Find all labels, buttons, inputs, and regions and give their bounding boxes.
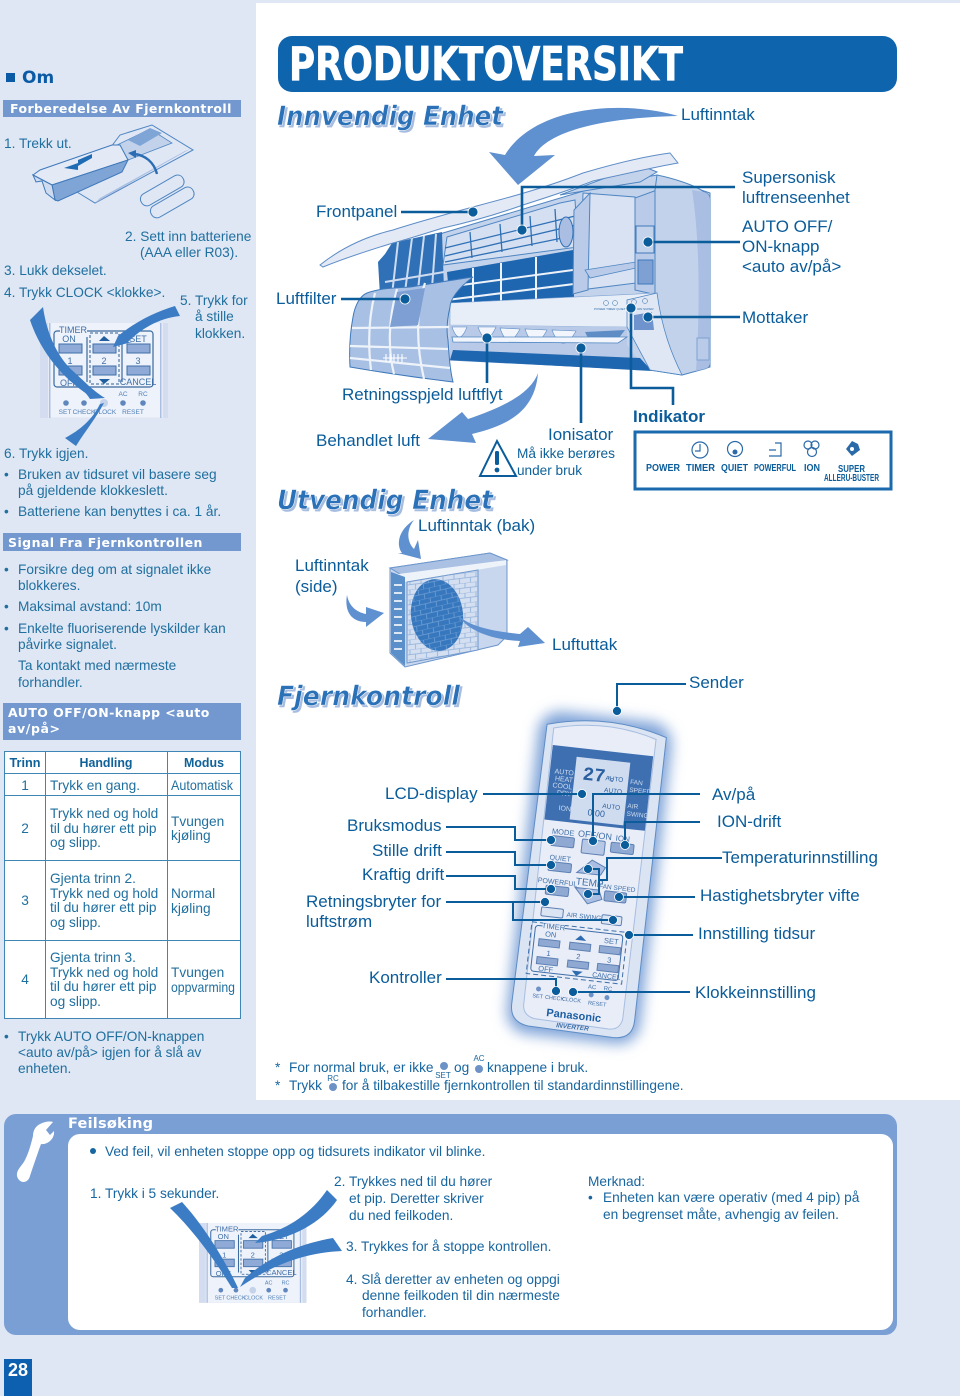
bullet notes: after step 6: Bruken av tidsuret vil basere seg	[18, 467, 217, 482]
footnotes: *	[275, 1060, 281, 1075]
signal notes: forhandler.	[18, 675, 83, 690]
heading: Innvendig Enhet: Innvendig Enhet	[277, 101, 504, 132]
labels: remote control: Bruksmodus	[347, 816, 441, 835]
signal notes: Enkelte fluoriserende lyskilder kan	[18, 621, 226, 636]
instruction steps 1-5: 5. Trykk for	[180, 293, 248, 308]
warning	[480, 441, 615, 478]
table: modes: Trykk en gang.	[50, 778, 140, 793]
arrow: press clock from below	[65, 403, 104, 446]
illustration: remote control: SWING	[626, 811, 649, 820]
illustration: remote control: TEMP	[575, 876, 604, 891]
footnotes: SET	[435, 1071, 451, 1080]
heading bar: auto off/on: AUTO OFF/ON-knapp <auto	[8, 705, 210, 720]
signal notes: •	[4, 562, 9, 577]
signal notes: •	[4, 621, 9, 636]
footnotes: knappene i bruk.	[487, 1060, 588, 1075]
footnotes: Trykk	[289, 1078, 322, 1093]
heading: Om	[6, 68, 54, 88]
troubleshooting keypad: CANCEL	[266, 1268, 297, 1277]
panel: troubleshooting	[4, 1114, 897, 1335]
illustration: remote control: TIMER	[541, 921, 566, 933]
labels: remote control: ION-drift	[717, 812, 782, 831]
illustration: remote control: POWERFUL	[537, 877, 578, 889]
labels: indoor unit: Ionisator	[548, 425, 614, 444]
illustration: remote control: SET	[604, 936, 619, 947]
indicator panel: POWERFUL	[754, 462, 796, 474]
footnotes: og	[454, 1060, 469, 1075]
leaders: remote control	[446, 684, 722, 996]
instruction steps 1-5: klokken.	[195, 326, 245, 341]
labels: remote control: Kontroller	[369, 968, 442, 987]
troubleshooting keypad: TIMER	[215, 1224, 239, 1233]
illustration: timer keypad: RC	[138, 391, 148, 398]
labels: remote control	[306, 673, 878, 1002]
indicator panel	[633, 408, 891, 489]
arrow: treated air	[428, 373, 538, 443]
illustration: outdoor unit	[390, 553, 507, 667]
labels: indoor unit: ON-knapp	[742, 237, 819, 256]
heading bar: auto off/on	[3, 703, 241, 740]
illustration: remote control	[505, 709, 674, 1046]
illustration: remote control: AUTO	[602, 803, 621, 812]
table: modes: 4	[21, 972, 29, 987]
indicator panel: ALLERU-BUSTER	[824, 472, 879, 484]
illustration: remote control: CANCEL	[592, 972, 621, 982]
bullet notes: after step 6: •	[4, 504, 9, 519]
note: auto button again: •	[4, 1029, 9, 1044]
table: modes: og slipp.	[50, 835, 101, 850]
illustration: timer keypad: 1	[67, 356, 73, 366]
panel: troubleshooting: Feilsøking	[68, 1116, 153, 1132]
illustration: remote control: COOL	[552, 782, 573, 791]
illustration: remote control: INVERTER	[556, 1022, 589, 1033]
illustration: remote control: ION	[558, 805, 571, 813]
bullet notes: after step 6: Batteriene kan benyttes i ca. 1 år.	[18, 504, 221, 519]
indicator panel: POWER	[646, 462, 680, 474]
troubleshooting text: Enheten kan være operativ (med 4 pip) på	[603, 1190, 860, 1205]
table: modes: Handling	[80, 755, 133, 770]
table: modes: Gjenta trinn 3.	[50, 950, 136, 965]
footnotes: *	[275, 1078, 281, 1093]
illustration: timer keypad: RESET	[122, 409, 144, 416]
arrow: press clock	[30, 307, 105, 399]
troubleshooting keypad: 1	[222, 1250, 226, 1259]
page number: 28	[8, 1360, 28, 1380]
footnotes: AC	[473, 1054, 485, 1063]
instruction steps 1-5: 1. Trekk ut.	[4, 136, 72, 151]
page number	[4, 1359, 32, 1396]
table: modes	[4, 751, 240, 1018]
troubleshooting text: 3. Trykkes for å stoppe kontrollen.	[346, 1239, 551, 1254]
title banner: PRODUKTOVERSIKT	[289, 37, 683, 91]
heading bar: Forberedelse: Forberedelse Av Fjernkontroll	[10, 101, 232, 116]
labels: outdoor unit: Luftinntak (bak)	[418, 516, 535, 535]
illustration: timer keypad: TIMER	[59, 325, 87, 335]
illustration: timer keypad: CHECK	[73, 409, 96, 416]
labels: indoor unit	[276, 105, 850, 450]
troubleshooting text: 4. Slå deretter av enheten og oppgi	[346, 1272, 560, 1287]
table: modes: Trykk ned og hold	[50, 965, 158, 980]
illustration: indoor unit: ION SUPER	[637, 307, 654, 311]
labels: outdoor unit: Luftinntak	[295, 556, 369, 575]
arrow: troubleshooting step 1	[170, 1202, 238, 1288]
labels: outdoor unit	[295, 516, 618, 654]
labels: remote control: Stille drift	[372, 841, 442, 860]
warning: under bruk	[517, 462, 583, 478]
illustration: remote control: AIR SWING	[566, 912, 601, 922]
arrow: side intake	[346, 595, 384, 627]
signal notes: Maksimal avstand: 10m	[18, 599, 162, 614]
bullet notes: after step 6: •	[4, 467, 9, 482]
table: modes: Automatisk	[171, 778, 233, 793]
troubleshooting keypad: RESET	[268, 1295, 287, 1301]
troubleshooting keypad: CLOCK	[244, 1295, 263, 1301]
troubleshooting text: et pip. Deretter skriver	[349, 1191, 484, 1206]
labels: remote control: luftstrøm	[306, 912, 372, 931]
troubleshooting keypad: OFF	[216, 1269, 231, 1278]
signal notes: •	[4, 599, 9, 614]
table: modes: Tvungen	[171, 814, 224, 829]
heading: Om: Om	[22, 68, 54, 88]
panel: product overview	[256, 3, 960, 1100]
table: modes: Normal	[171, 886, 215, 901]
illustration: indoor unit	[320, 153, 710, 382]
troubleshooting text	[90, 1144, 860, 1320]
illustration: remote battery compartment	[33, 125, 196, 220]
illustration: remote control: FAN	[630, 779, 643, 787]
troubleshooting keypad: SET	[215, 1295, 226, 1301]
labels: remote control: Av/på	[712, 785, 756, 804]
illustration: remote control: OFF/ON	[578, 828, 612, 842]
illustration: remote control: QUIET	[549, 854, 572, 864]
indicator panel: ION	[804, 462, 820, 474]
illustration: timer keypad: CLOCK	[94, 409, 117, 416]
illustration: timer keypad: AC	[118, 391, 128, 398]
illustration: remote control: FAN SPEED	[599, 883, 636, 894]
troubleshooting text: denne feilkoden til din nærmeste	[362, 1288, 560, 1303]
arrow: set clock	[113, 306, 180, 347]
note: auto button again: Trykk AUTO OFF/ON-knappen	[18, 1029, 204, 1044]
illustration: timer keypad: 3	[135, 356, 141, 366]
labels: outdoor unit: (side)	[295, 577, 338, 596]
arrow: troubleshooting step 3	[240, 1238, 342, 1287]
labels: indoor unit: Retningsspjeld luftflyt	[342, 385, 503, 404]
table: modes: 2	[21, 821, 29, 836]
illustration: remote control: AUTO	[605, 775, 624, 784]
heading bar: auto off/on: av/på>	[8, 721, 61, 736]
icon: wrench	[17, 1122, 54, 1182]
troubleshooting keypad: AC	[265, 1280, 273, 1286]
illustration: remote control: Panasonic	[546, 1007, 602, 1025]
table: modes: til du hører ett pip	[50, 821, 157, 836]
labels: indoor unit: Frontpanel	[316, 202, 397, 221]
note: auto button again: enheten.	[18, 1061, 71, 1076]
leaders: indoor unit	[341, 187, 740, 423]
illustration: remote control: AUTO	[554, 768, 575, 778]
illustration: remote control: SPEED	[629, 787, 652, 796]
illustration: remote control: 3	[607, 955, 612, 965]
labels: remote control: LCD-display	[385, 784, 478, 803]
instruction steps 1-5	[4, 136, 251, 341]
bullet notes: after step 6: 6. Trykk igjen.	[4, 446, 88, 461]
illustration: remote control: ON	[545, 929, 557, 940]
signal notes: Forsikre deg om at signalet ikke	[18, 562, 211, 577]
labels: indoor unit: <auto av/på>	[742, 257, 841, 276]
illustration: timer keypad: SET	[59, 409, 71, 416]
table: modes: 3	[21, 893, 29, 908]
troubleshooting text: forhandler.	[362, 1305, 427, 1320]
illustration: timer keypad	[40, 323, 168, 418]
troubleshooting text: •	[588, 1190, 593, 1205]
indicator panel: Indikator	[633, 408, 706, 426]
heading: Utvendig Enhet: Utvendig Enhet	[277, 485, 494, 516]
troubleshooting text: en begrenset måte, avhengig av feilen.	[603, 1207, 839, 1222]
note: auto button again	[4, 1029, 204, 1076]
illustration: timer keypad: CANCEL	[120, 377, 156, 387]
illustration: remote control: RC	[603, 986, 613, 993]
troubleshooting keypad: 3	[279, 1250, 283, 1259]
labels: outdoor unit: Luftuttak	[552, 635, 618, 654]
labels: remote control: Kraftig drift	[362, 865, 444, 884]
troubleshooting text: du ned feilkoden.	[349, 1208, 453, 1223]
table: modes: Modus	[184, 755, 224, 770]
instruction steps 1-5: 3. Lukk dekselet.	[4, 263, 107, 278]
troubleshooting text: 1. Trykk i 5 sekunder.	[90, 1186, 219, 1201]
labels: remote control: Sender	[689, 673, 744, 692]
illustration: remote control: 1	[546, 949, 551, 958]
labels: remote control: Temperaturinnstilling	[722, 848, 878, 867]
labels: indoor unit: Luftfilter	[276, 289, 337, 308]
labels: indoor unit: luftrenseenhet	[742, 188, 850, 207]
illustration: remote control: CHECK	[545, 995, 565, 1003]
footnotes	[275, 1054, 684, 1093]
labels: remote control: Hastighetsbryter vifte	[700, 886, 860, 905]
instruction steps 1-5: 4. Trykk CLOCK <klokke>.	[4, 285, 165, 300]
instruction steps 1-5: (AAA eller R03).	[140, 245, 238, 260]
table: modes: Trinn	[10, 755, 41, 770]
table: modes: til du hører ett pip	[50, 979, 157, 994]
illustration: remote control: AUTO	[604, 787, 622, 796]
footnotes: for å tilbakestille fjernkontrollen til standardinnstillingene.	[342, 1078, 684, 1093]
illustration: timer keypad: 2	[101, 356, 107, 366]
bullet notes: after step 6	[4, 446, 221, 519]
footnotes: For normal bruk, er ikke	[289, 1060, 434, 1075]
table: modes: 1	[21, 778, 29, 793]
table: modes: og slipp.	[50, 994, 101, 1009]
arrow: air intake	[489, 108, 678, 185]
labels: remote control: Retningsbryter for	[306, 892, 441, 911]
illustration: remote control: SET	[532, 993, 544, 1001]
labels: remote control: Innstilling tidsur	[698, 924, 816, 943]
troubleshooting keypad: RC	[282, 1280, 290, 1286]
illustration: remote control: OFF	[538, 964, 554, 974]
arrow: outlet	[458, 615, 545, 647]
illustration: remote control: AC	[588, 984, 597, 991]
labels: indoor unit: Behandlet luft	[316, 431, 420, 450]
illustration: remote control: 0:00	[587, 807, 606, 819]
signal notes: blokkeres.	[18, 578, 80, 593]
warning: Må ikke berøres	[517, 445, 615, 461]
table: modes: kjøling	[171, 828, 211, 843]
labels: remote control: Klokkeinnstilling	[695, 983, 816, 1002]
illustration: remote control: HEAT	[554, 775, 574, 785]
labels: indoor unit: AUTO OFF/	[742, 217, 833, 236]
indicator panel: QUIET	[721, 462, 748, 474]
indicator panel: SUPER	[838, 463, 865, 475]
illustration: remote control: °c	[607, 775, 615, 784]
illustration: remote control: RESET	[588, 1001, 607, 1009]
instruction steps 1-5: å stille	[195, 309, 234, 324]
footnotes: RC	[327, 1074, 339, 1083]
troubleshooting keypad: SET	[274, 1232, 289, 1241]
illustration: remote control: CLOCK	[562, 997, 582, 1005]
illustration: timer keypad: OFF	[60, 378, 78, 388]
instruction steps 1-5: 2. Sett inn batteriene	[125, 229, 251, 244]
labels: indoor unit: Luftinntak	[681, 105, 755, 124]
illustration: remote control: DRY	[556, 790, 572, 798]
troubleshooting text: Merknad:	[588, 1174, 645, 1189]
signal notes	[4, 562, 226, 690]
illustration: indoor unit: POWER TIMER QUIET	[594, 307, 626, 311]
table: modes: og slipp.	[50, 915, 101, 930]
bullet notes: after step 6: på gjeldende klokkeslett.	[18, 483, 168, 498]
indicator panel: TIMER	[686, 462, 715, 474]
illustration: remote control: 27	[581, 764, 607, 788]
illustration: timer keypad: SET	[129, 334, 147, 344]
signal notes: Ta kontakt med nærmeste	[18, 658, 176, 673]
table: modes: Tvungen	[171, 965, 224, 980]
heading bar: signal	[3, 533, 241, 551]
illustration: remote control: AIR	[627, 803, 639, 811]
troubleshooting keypad: ON	[218, 1232, 229, 1241]
table: modes: til du hører ett pip	[50, 900, 157, 915]
arrow: rear intake	[398, 520, 421, 559]
illustration: remote control: ION	[615, 834, 631, 844]
troubleshooting text: Ved feil, vil enheten stoppe opp og tidsurets indikator vil blinke.	[105, 1144, 485, 1159]
heading: Fjernkontroll: Fjernkontroll	[277, 681, 461, 712]
labels: indoor unit: Mottaker	[742, 308, 808, 327]
signal notes: påvirke signalet.	[18, 637, 117, 652]
table: modes: kjøling	[171, 901, 211, 916]
arrow: troubleshooting step 2	[255, 1190, 337, 1243]
table: modes: oppvarming	[171, 980, 235, 995]
table: modes: Trykk ned og hold	[50, 806, 158, 821]
troubleshooting keypad: CHECK	[226, 1295, 246, 1301]
note: auto button again: <auto av/på> igjen for å slå av	[18, 1045, 202, 1060]
illustration: timer keypad: ON	[62, 334, 76, 344]
table: modes: Trykk ned og hold	[50, 886, 158, 901]
troubleshooting keypad	[199, 1223, 307, 1303]
heading bar: signal: Signal Fra Fjernkontrollen	[8, 535, 203, 550]
illustration: remote control: 2	[576, 952, 581, 961]
illustration: remote control: MODE	[551, 826, 575, 838]
table: modes: Gjenta trinn 2.	[50, 871, 136, 886]
labels: indoor unit: Supersonisk	[742, 168, 836, 187]
troubleshooting text: 2. Trykkes ned til du hører	[334, 1174, 493, 1189]
troubleshooting keypad: 2	[251, 1250, 255, 1259]
